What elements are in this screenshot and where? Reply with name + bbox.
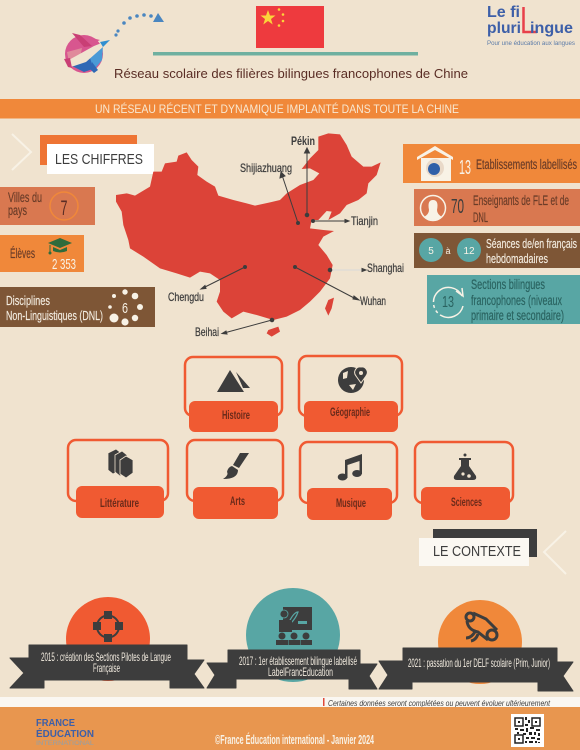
icon: mountains xyxy=(217,370,250,392)
heading: le contexte: LE CONTEXTE xyxy=(433,543,521,560)
copyright: ©France Éducation international - Janvier 2024 xyxy=(215,732,374,747)
stat: villes du pays: 7 xyxy=(60,197,68,220)
footer xyxy=(0,707,580,750)
card: Musique xyxy=(300,442,397,520)
logo: Le fil pluriLingue: ingue xyxy=(530,20,573,37)
stat: séances hebdomadaires: 12 xyxy=(463,246,475,257)
note strip xyxy=(0,697,580,708)
stat: enseignants xyxy=(414,189,580,226)
card: Géographie xyxy=(299,356,402,432)
stat: séances hebdomadaires xyxy=(414,233,580,268)
flag of China xyxy=(256,6,324,48)
city connectors xyxy=(201,148,366,334)
title: Réseau scolaire des filières bilingues francophones de Chine xyxy=(114,66,468,81)
stat: villes du pays: pays xyxy=(8,203,27,218)
timeline: 2015: Française xyxy=(93,661,120,675)
ribbon xyxy=(10,645,204,688)
stat: établissements labellisés: 13 xyxy=(459,157,471,179)
timeline: 2017: 2017 : 1er établissement bilingue labellisé xyxy=(239,654,357,668)
card: Arts xyxy=(187,440,283,519)
logo: Le fil pluriLingue: Le fi xyxy=(487,4,520,21)
logo: France Éducation International: FRANCE xyxy=(36,717,75,729)
icon: classroom xyxy=(276,607,312,645)
logo: Le fil pluriLingue xyxy=(487,4,576,47)
city labels: Wuhan xyxy=(360,294,386,308)
card: Histoire xyxy=(185,357,282,432)
stat: sections bilingues xyxy=(427,275,580,324)
card: Arts: Arts xyxy=(230,494,245,508)
stat: disciplines non-linguistiques: 6 xyxy=(122,300,128,317)
card: Littérature xyxy=(68,440,168,518)
city labels: Chengdu xyxy=(168,290,204,304)
map of China with cities xyxy=(116,133,404,339)
card: Histoire: Histoire xyxy=(222,408,250,422)
card: Littérature: Littérature xyxy=(100,496,139,510)
icon: flask xyxy=(454,454,476,480)
stat: établissements labellisés xyxy=(403,144,580,183)
city labels: Pékin xyxy=(291,134,315,148)
QR code xyxy=(511,714,544,747)
stat: enseignants: 70 xyxy=(451,196,464,218)
stat: séances hebdomadaires: hebdomadaires xyxy=(486,251,548,266)
stat: séances hebdomadaires: à xyxy=(445,246,451,256)
icon: music notes xyxy=(338,454,362,480)
timeline: 2021 xyxy=(379,600,573,691)
stat: villes du pays: Villes du xyxy=(8,190,42,205)
logo: France Éducation International: ÉDUCATION xyxy=(36,727,94,740)
stat: disciplines non-linguistiques: Disciplines xyxy=(6,293,50,308)
stat: séances hebdomadaires: 5 xyxy=(428,246,434,257)
stat: enseignants: DNL xyxy=(473,210,488,225)
stat: villes du pays xyxy=(0,187,95,225)
card: Géographie: Géographie xyxy=(330,405,370,419)
banner xyxy=(0,99,580,118)
card: Sciences xyxy=(415,442,513,520)
stat: élèves: Élèves xyxy=(10,246,35,261)
stat: sections bilingues: Sections bilingues xyxy=(471,277,545,292)
logo: France Éducation International: INTERNATIONAL xyxy=(36,740,94,747)
icon: books xyxy=(108,449,133,478)
timeline: 2015: 2015 : création des Sections Pilotes de Langue xyxy=(41,650,171,664)
stat: sections bilingues: 13 xyxy=(442,294,454,311)
city labels: Shanghai xyxy=(367,261,404,275)
city labels: Beihai xyxy=(195,325,219,339)
heading: les chiffres xyxy=(12,134,154,174)
icon: connected squares xyxy=(93,611,123,642)
timeline: 2017 xyxy=(207,588,377,689)
stat: disciplines non-linguistiques xyxy=(0,287,155,327)
icon: paint brush xyxy=(223,453,249,479)
stat: élèves: 2 353 xyxy=(52,256,76,273)
ribbon xyxy=(207,650,377,689)
icon: plane globe with dotted path xyxy=(64,13,164,73)
stat: disciplines non-linguistiques: Non-Linguistiques (DNL) xyxy=(6,308,103,323)
card: Sciences: Sciences xyxy=(451,495,482,509)
timeline: 2015 xyxy=(10,597,204,688)
city labels: Tianjin xyxy=(351,214,378,228)
icon: diploma scroll xyxy=(466,613,497,641)
timeline: 2017: LabelFrancEducation xyxy=(268,665,333,679)
stat: élèves xyxy=(0,235,84,273)
heading: le contexte xyxy=(419,529,566,574)
city labels xyxy=(168,134,404,339)
logo: France Éducation International xyxy=(36,717,94,747)
logo: Le fil pluriLingue: pluri xyxy=(487,20,521,37)
city labels: Shijiazhuang xyxy=(240,161,292,175)
banner: UN RÉSEAU RÉCENT ET DYNAMIQUE IMPLANTÉ DANS TOUTE LA CHINE xyxy=(95,101,459,116)
card: Musique: Musique xyxy=(336,496,366,510)
map shape xyxy=(116,133,381,337)
icon: globe with pin xyxy=(338,367,367,393)
title rule xyxy=(153,52,418,56)
logo: Le fil pluriLingue: Pour une éducation aux langues xyxy=(487,40,576,47)
ribbon xyxy=(379,648,573,691)
heading: les chiffres: LES CHIFFRES xyxy=(55,151,143,168)
